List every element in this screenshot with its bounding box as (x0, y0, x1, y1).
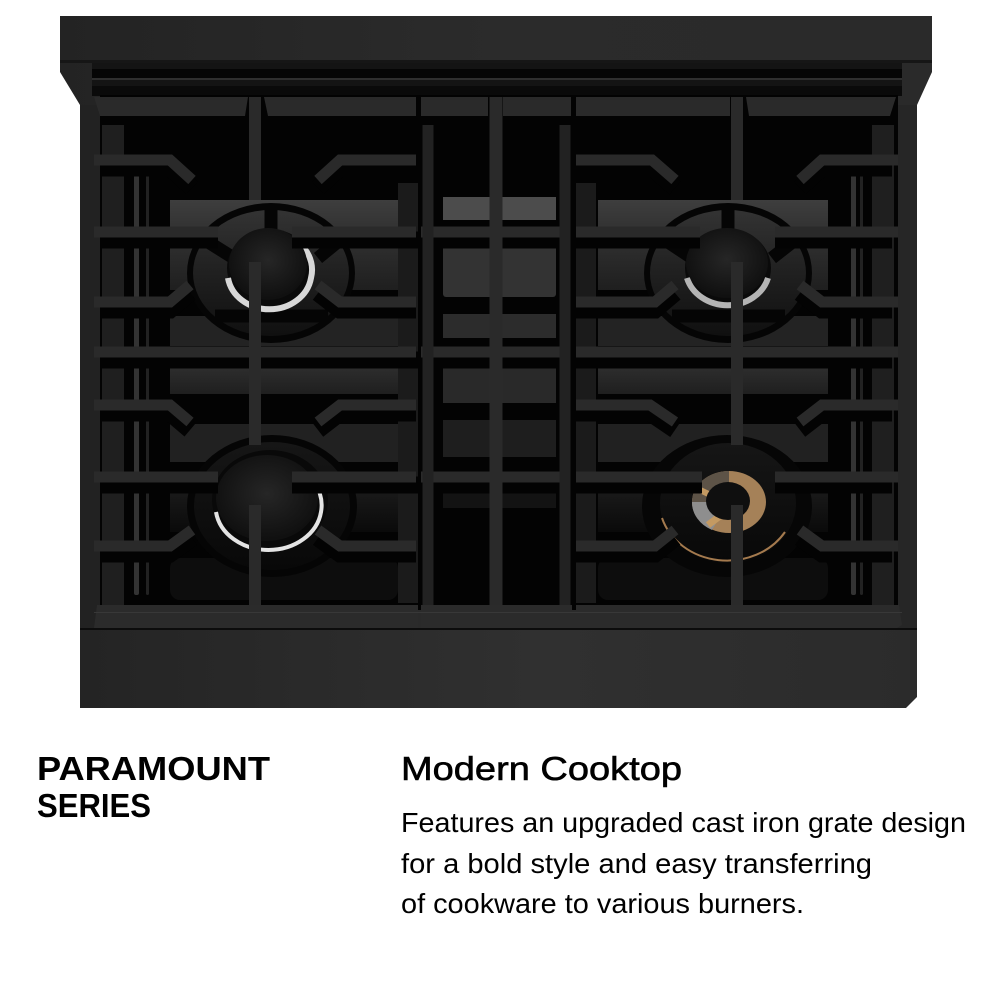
series label: PARAMOUNT (37, 750, 270, 787)
burner cap (229, 228, 307, 300)
side columns (80, 105, 100, 630)
grate: cross bars (94, 160, 898, 546)
chrome ring (227, 229, 313, 307)
vent slots (60, 60, 932, 96)
range body (60, 16, 932, 708)
grate: front rail (80, 605, 917, 630)
grate shadows (102, 168, 892, 554)
side ribs (102, 125, 124, 605)
porcelain panels: left (170, 200, 398, 600)
series label (37, 750, 270, 824)
porcelain panels: right (598, 200, 828, 600)
drip dish (187, 203, 355, 343)
description: for a bold style and easy transferring (401, 848, 872, 879)
burner: bottom right brass (642, 435, 812, 577)
description: of cookware to various burners. (401, 888, 804, 919)
description (401, 807, 966, 919)
burner: top right (644, 203, 812, 343)
grate: vertical bars (255, 97, 737, 606)
hood back panel (60, 16, 932, 630)
burner: bottom left (187, 435, 357, 577)
burner centre cap (706, 482, 750, 520)
porcelain panels: centre (443, 197, 556, 508)
grate: back rail (94, 97, 896, 116)
front panel (80, 630, 917, 708)
side sheen (134, 175, 139, 595)
series label: SERIES (37, 787, 151, 824)
burner: top left (187, 203, 355, 343)
cooktop well (100, 95, 898, 610)
description: Features an upgraded cast iron grate design (401, 807, 966, 838)
heading: Modern Cooktop (401, 750, 682, 787)
